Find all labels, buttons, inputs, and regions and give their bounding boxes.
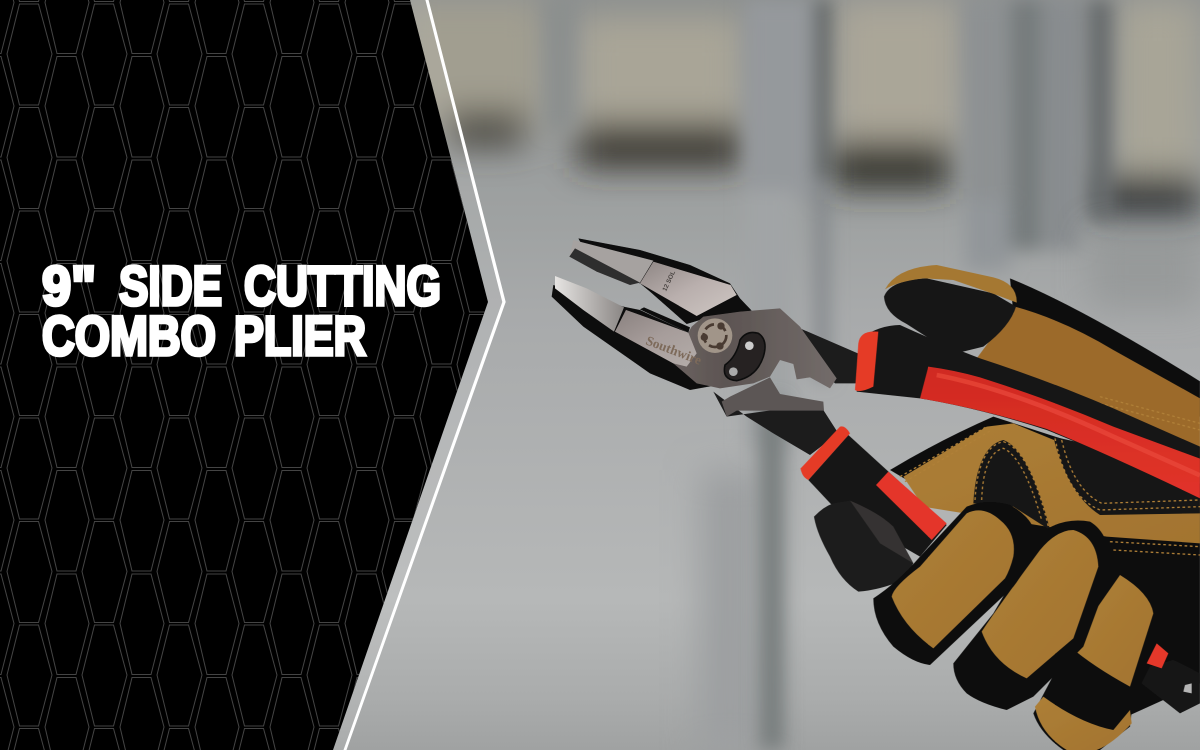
title: SIDE	[119, 254, 222, 317]
title	[42, 254, 441, 367]
title: COMBO	[42, 304, 216, 367]
upper handle steel	[800, 328, 862, 383]
plier jaws and head	[552, 238, 862, 455]
lower cutter	[722, 377, 824, 417]
upper jaw	[578, 238, 752, 324]
background: blurred workshop photo	[334, 0, 1200, 750]
stitching	[900, 307, 1200, 555]
first finger	[873, 502, 1035, 665]
title: PLIER	[234, 304, 366, 367]
plier jaws and head: 12 SOL	[661, 270, 677, 293]
logo disc	[698, 318, 732, 353]
glove back	[1010, 278, 1200, 417]
panel: black chevron with hexagon pattern	[0, 0, 488, 750]
palm pads	[973, 440, 1050, 530]
lower handle steel	[713, 392, 838, 455]
palm brown	[903, 423, 1200, 543]
lower jaw	[552, 285, 727, 390]
jaw gap	[640, 307, 690, 333]
thumb tip	[885, 265, 1017, 303]
engraved marks: Southwire	[644, 333, 704, 368]
title: 9"	[42, 254, 96, 317]
thumb body	[977, 307, 1200, 470]
lower handle	[808, 435, 947, 557]
knuckle	[814, 501, 913, 592]
hand and handles	[801, 265, 1200, 750]
translucent chevron band	[333, 0, 504, 750]
slot	[724, 332, 765, 381]
third finger	[1033, 652, 1132, 750]
title: CUTTING	[244, 254, 441, 317]
palm outer	[890, 417, 1200, 717]
thumb pad	[884, 278, 1016, 354]
handle end	[1142, 660, 1200, 713]
upper handle	[857, 325, 1200, 498]
white chevron outline	[344, 0, 506, 750]
second finger	[953, 521, 1112, 710]
